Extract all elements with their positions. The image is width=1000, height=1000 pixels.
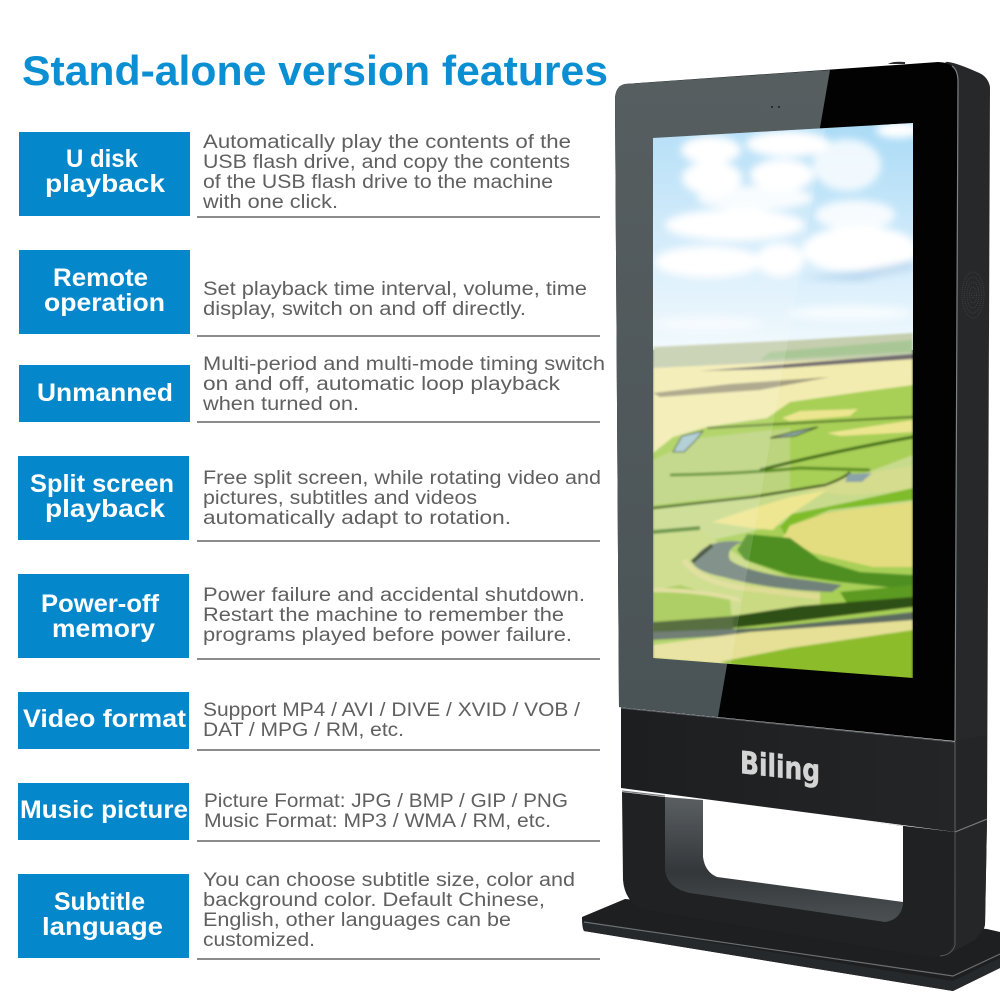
feature row: U disk playback: Automatically play the contents of the: [203, 132, 571, 153]
feature row: Power-off memory: Power-off: [41, 590, 160, 618]
speaker grille: [962, 272, 984, 318]
feature row: Video format: Video format: [23, 705, 187, 733]
feature row: Unmanned: on and off, automatic loop playback: [203, 374, 561, 395]
feature row: Video format: Support MP4 / AVI / DIVE / XVID / VOB /: [203, 700, 581, 721]
feature row: Split screen playback: [18, 456, 601, 542]
feature row: Remote operation: operation: [44, 289, 165, 317]
fields: [653, 358, 913, 454]
feature row: U disk playback: [19, 132, 600, 218]
feature row: Split screen playback: playback: [45, 495, 165, 523]
feature row: Music picture: Music picture: [20, 796, 188, 824]
feature row: Split screen playback: automatically adapt to rotation.: [203, 508, 511, 529]
feature row: Power-off memory: Power failure and accidental shutdown.: [203, 585, 585, 606]
feature row: Subtitle language: You can choose subtitle size, color and: [203, 870, 575, 891]
microphone dots: [771, 106, 780, 108]
front glass glare: [615, 70, 830, 717]
glass reflection over screen: [653, 120, 827, 680]
feature row: U disk playback: of the USB flash drive to the machine: [203, 172, 553, 193]
feature row: Remote operation: display, switch on and off directly.: [203, 299, 526, 320]
feature row: Remote operation: Remote: [53, 264, 148, 292]
feature row: Power-off memory: programs played before power failure.: [203, 625, 572, 646]
screen landscape photo: [653, 120, 920, 690]
feature row: Video format: DAT / MPG / RM, etc.: [203, 720, 404, 741]
distant hills: [653, 333, 913, 370]
cloud shadows: [800, 262, 913, 280]
top button: [888, 62, 905, 64]
feature row: Music picture: Music Format: MP3 / WMA / RM, etc.: [204, 811, 551, 832]
feature row: Unmanned: Multi-period and multi-mode timing switch: [203, 354, 605, 375]
title: Stand-alone version features: [22, 47, 608, 94]
kiosk product illustration: [582, 62, 1000, 991]
feature row: Power-off memory: memory: [52, 615, 155, 643]
feature row: Unmanned: when turned on.: [202, 394, 359, 415]
front face: [615, 62, 958, 741]
feature row: Music picture: [18, 783, 600, 842]
feature row: U disk playback: USB flash drive, and copy the contents: [203, 152, 570, 173]
feature row: U disk playback: U disk: [66, 145, 138, 173]
feature row: Power-off memory: [18, 574, 600, 660]
feature row: Split screen playback: Split screen: [30, 470, 174, 498]
feature row: Subtitle language: background color. Default Chinese,: [203, 890, 545, 911]
feature row: Video format: [18, 692, 600, 751]
feature row: Unmanned: Unmanned: [37, 379, 173, 407]
U-shaped stand: [622, 792, 987, 957]
feature row: Subtitle language: [18, 870, 600, 960]
Biling logo: Biling: [740, 745, 820, 790]
feature row: Remote operation: Set playback time interval, volume, time: [203, 279, 587, 300]
feature row: Split screen playback: Free split screen, while rotating video and: [203, 468, 601, 489]
feature row: Subtitle language: customized.: [203, 930, 315, 951]
rivers and vegetation: [737, 534, 913, 590]
feature row: Power-off memory: Restart the machine to remember the: [203, 605, 564, 626]
base plate: [582, 899, 1000, 991]
side panel: [945, 62, 990, 832]
feature row: U disk playback: playback: [45, 170, 165, 198]
feature row: Remote operation: [19, 250, 600, 337]
feature row: Split screen playback: pictures, subtitles and videos: [203, 488, 477, 509]
feature row: U disk playback: with one click.: [202, 192, 338, 213]
front edge highlight: [952, 66, 958, 741]
feature row: Unmanned: [19, 354, 605, 423]
feature row: Subtitle language: English, other languages can be: [203, 910, 511, 931]
feature row: Subtitle language: Subtitle: [54, 888, 145, 916]
feature row: Music picture: Picture Format: JPG / BMP / GIP / PNG: [204, 791, 568, 812]
clouds: [653, 122, 920, 331]
feature row: Subtitle language: language: [42, 913, 163, 941]
logo band: [621, 708, 987, 832]
